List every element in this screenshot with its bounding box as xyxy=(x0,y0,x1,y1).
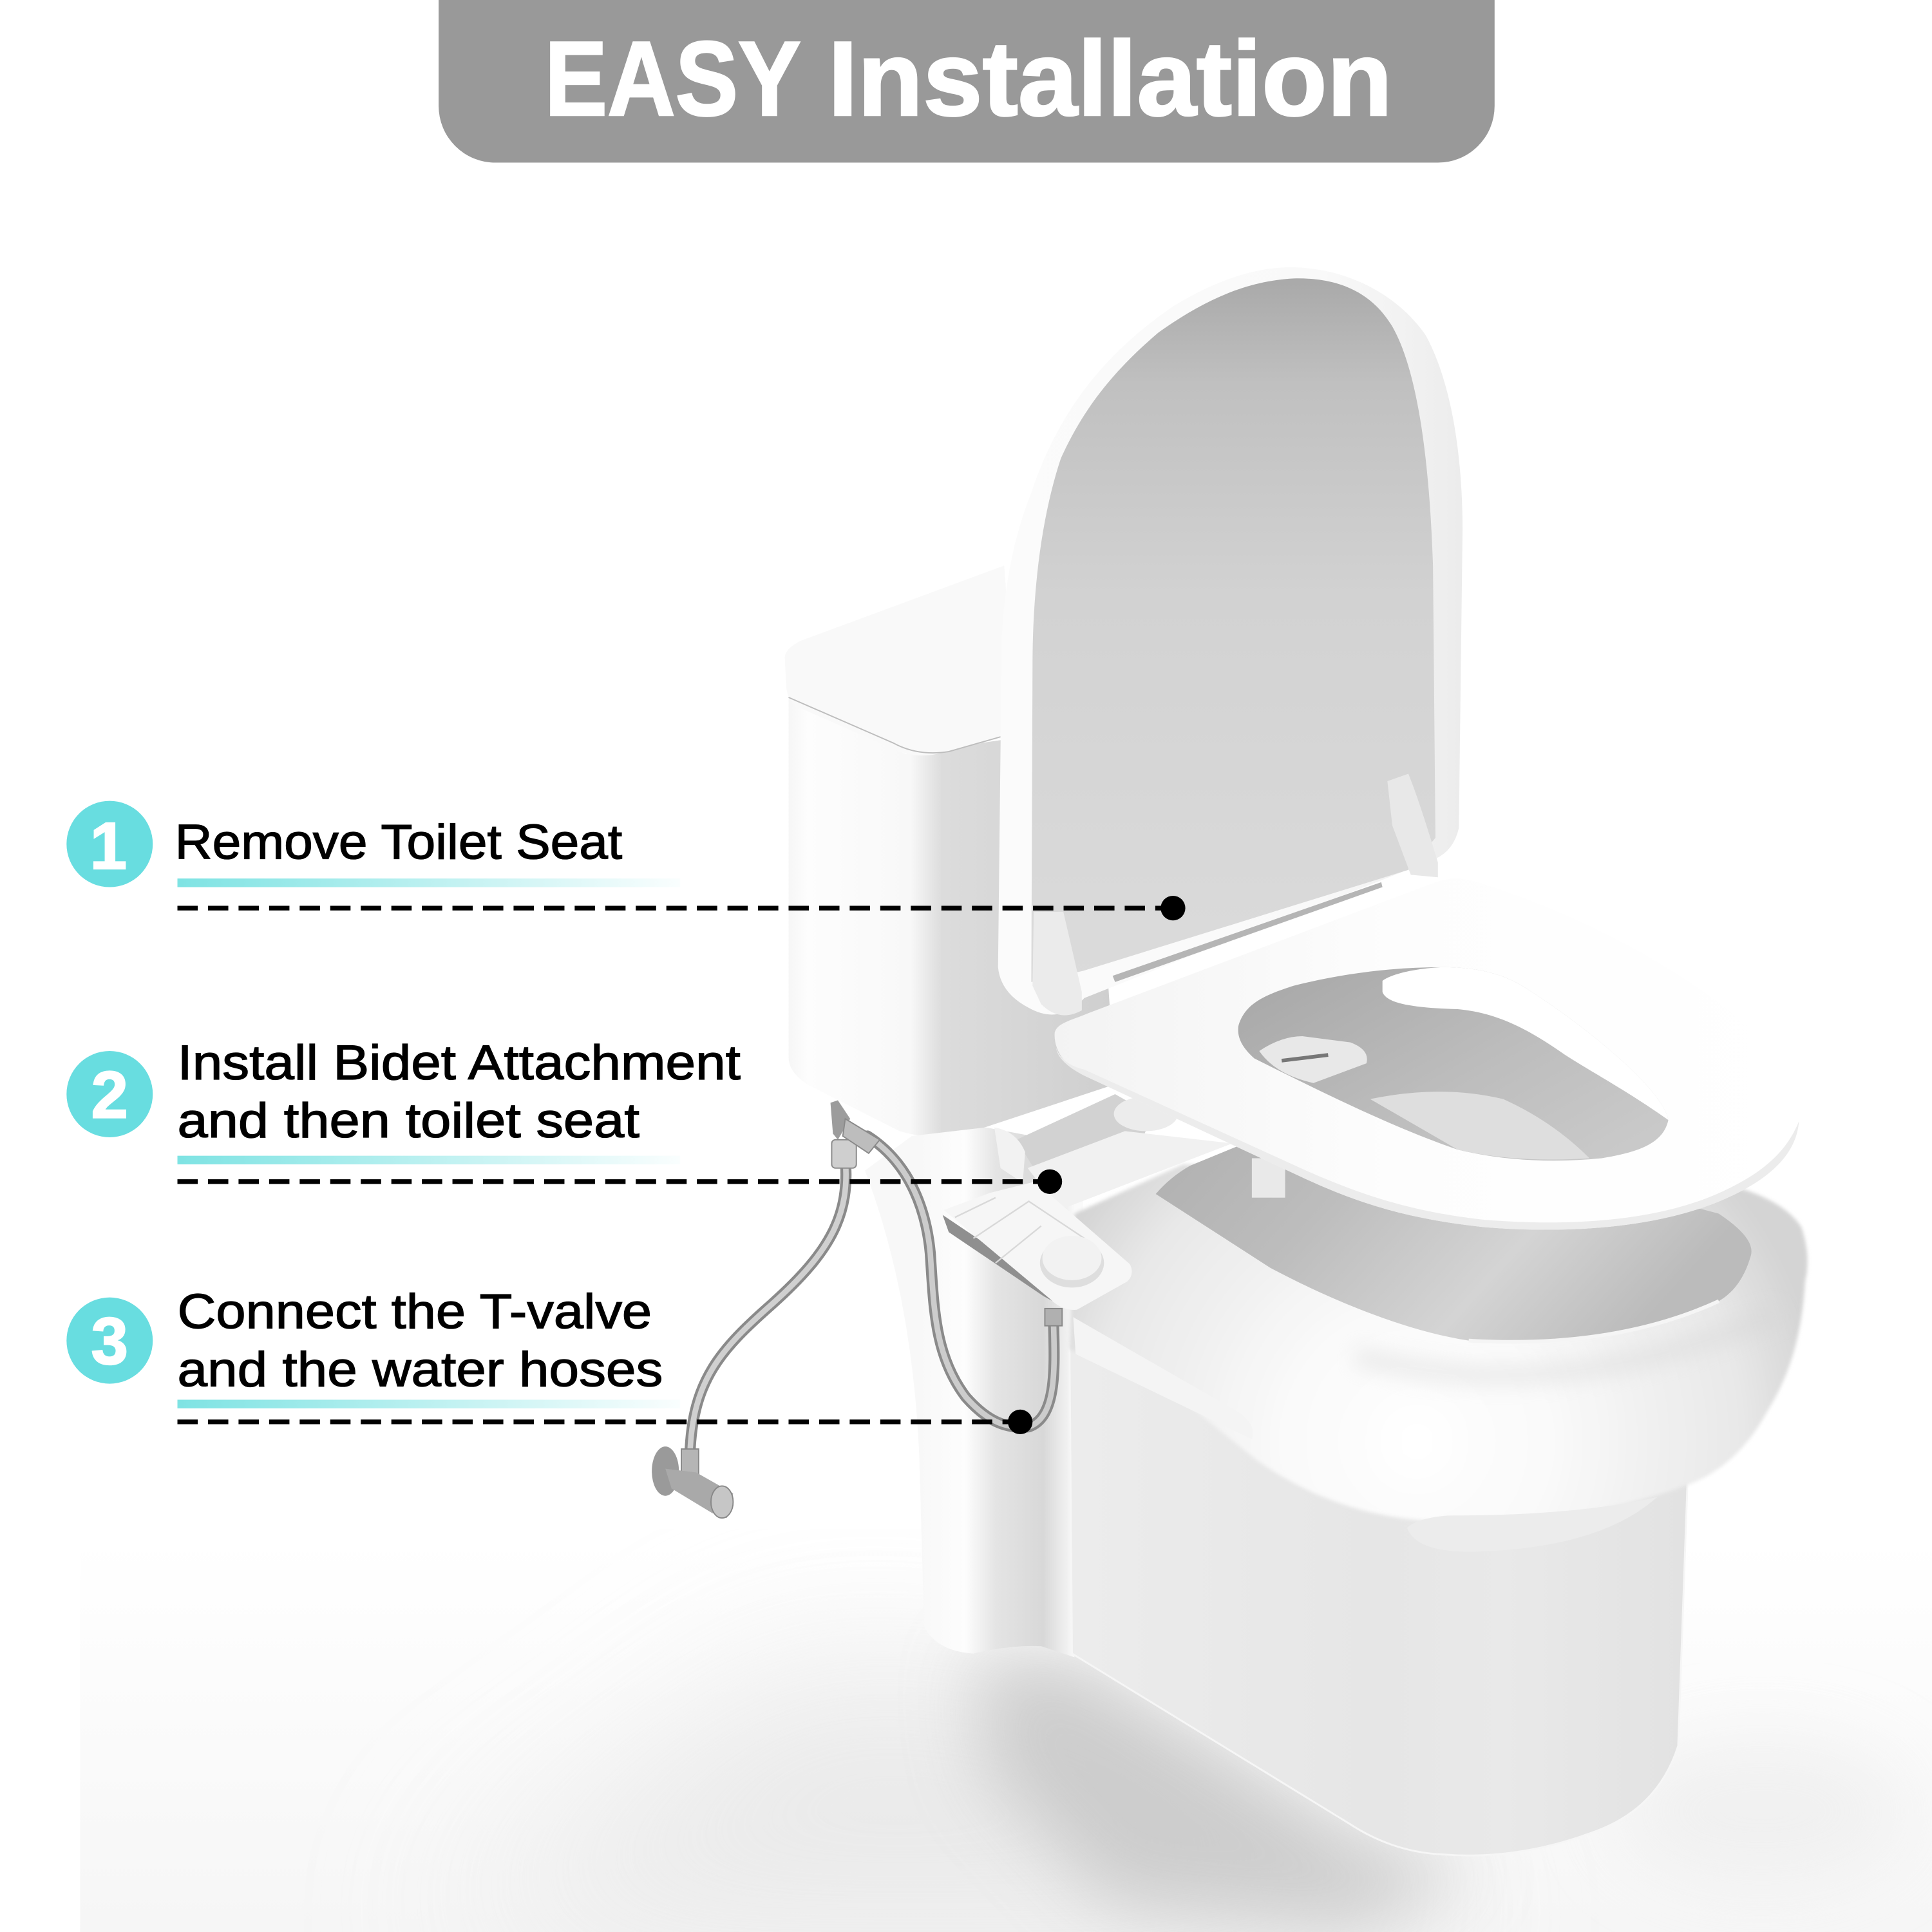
pedestal xyxy=(865,1128,1084,1657)
hinge right xyxy=(1387,774,1438,877)
step 1 xyxy=(66,801,1186,920)
seat front edge xyxy=(1056,1047,1799,1230)
white highlight in opening xyxy=(1383,967,1669,1120)
hinge strip xyxy=(1113,882,1383,982)
step 3 xyxy=(66,1284,1032,1434)
step 2: 2 xyxy=(91,1057,128,1132)
bidet mount in opening xyxy=(1259,1036,1367,1083)
toilet tank xyxy=(785,565,1115,1137)
toilet seat xyxy=(1055,878,1799,1230)
T-valve fitting xyxy=(831,1101,880,1168)
step 3: and the water hoses xyxy=(178,1342,663,1397)
bowl rim xyxy=(1070,1164,1808,1522)
step 3: Connect the T-valve xyxy=(178,1284,652,1339)
rim lower edge shadow xyxy=(1356,1312,1781,1376)
interior rim band xyxy=(1469,1301,1719,1342)
hose ferrule xyxy=(1045,1309,1062,1326)
step 1: 1 xyxy=(90,808,127,883)
toilet illustration xyxy=(652,267,1808,1855)
step 2: Install Bidet Attachment xyxy=(178,1036,741,1090)
toilet lid xyxy=(998,267,1463,1016)
bowl interior xyxy=(1156,1146,1752,1342)
lower bowl in opening xyxy=(1370,1092,1589,1160)
step 2 xyxy=(66,1036,1062,1194)
angle valve xyxy=(652,1446,733,1518)
step 3: 3 xyxy=(91,1303,128,1378)
bidet control panel xyxy=(943,1182,1132,1310)
hoses xyxy=(690,1136,1054,1454)
floor background xyxy=(80,1540,1932,1932)
title xyxy=(545,19,1392,138)
title banner xyxy=(439,0,1495,163)
hinge left xyxy=(1032,912,1082,1016)
lower rim tab xyxy=(1407,1497,1657,1551)
seat opening xyxy=(1238,967,1669,1160)
title: Installation xyxy=(828,19,1392,138)
bowl base xyxy=(1070,1343,1688,1855)
title: EASY xyxy=(545,19,801,138)
step 2: and then toilet seat xyxy=(178,1094,639,1148)
bidet bar xyxy=(994,1094,1285,1210)
rim highlight strip xyxy=(1073,1317,1253,1439)
step 1: Remove Toilet Seat xyxy=(175,815,622,870)
